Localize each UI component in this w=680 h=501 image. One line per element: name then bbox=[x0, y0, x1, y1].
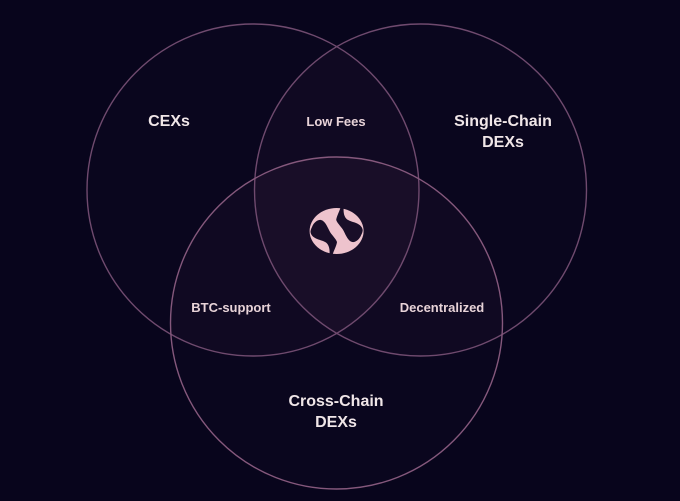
venn diagram bbox=[86, 23, 588, 490]
circle: Single-Chain DEXs bbox=[254, 24, 586, 356]
label: Cross-Chain DEXs: DEXs bbox=[315, 414, 357, 431]
circle fills and overlaps bbox=[255, 158, 418, 332]
label: Cross-Chain DEXs: Cross-Chain bbox=[288, 393, 384, 410]
label: Decentralized: Decentralized bbox=[400, 300, 484, 315]
label: CEXs: CEXs bbox=[148, 113, 190, 130]
circle: Cross-Chain DEXs bbox=[170, 157, 502, 489]
label: Low Fees: Low Fees bbox=[306, 114, 366, 129]
label: Single-Chain DEXs: Single-Chain bbox=[454, 113, 552, 130]
circle: CEXs bbox=[87, 24, 419, 356]
icon: logo bbox=[310, 207, 364, 255]
label: Single-Chain DEXs: DEXs bbox=[482, 134, 524, 151]
label: BTC-support: BTC-support bbox=[191, 300, 271, 315]
